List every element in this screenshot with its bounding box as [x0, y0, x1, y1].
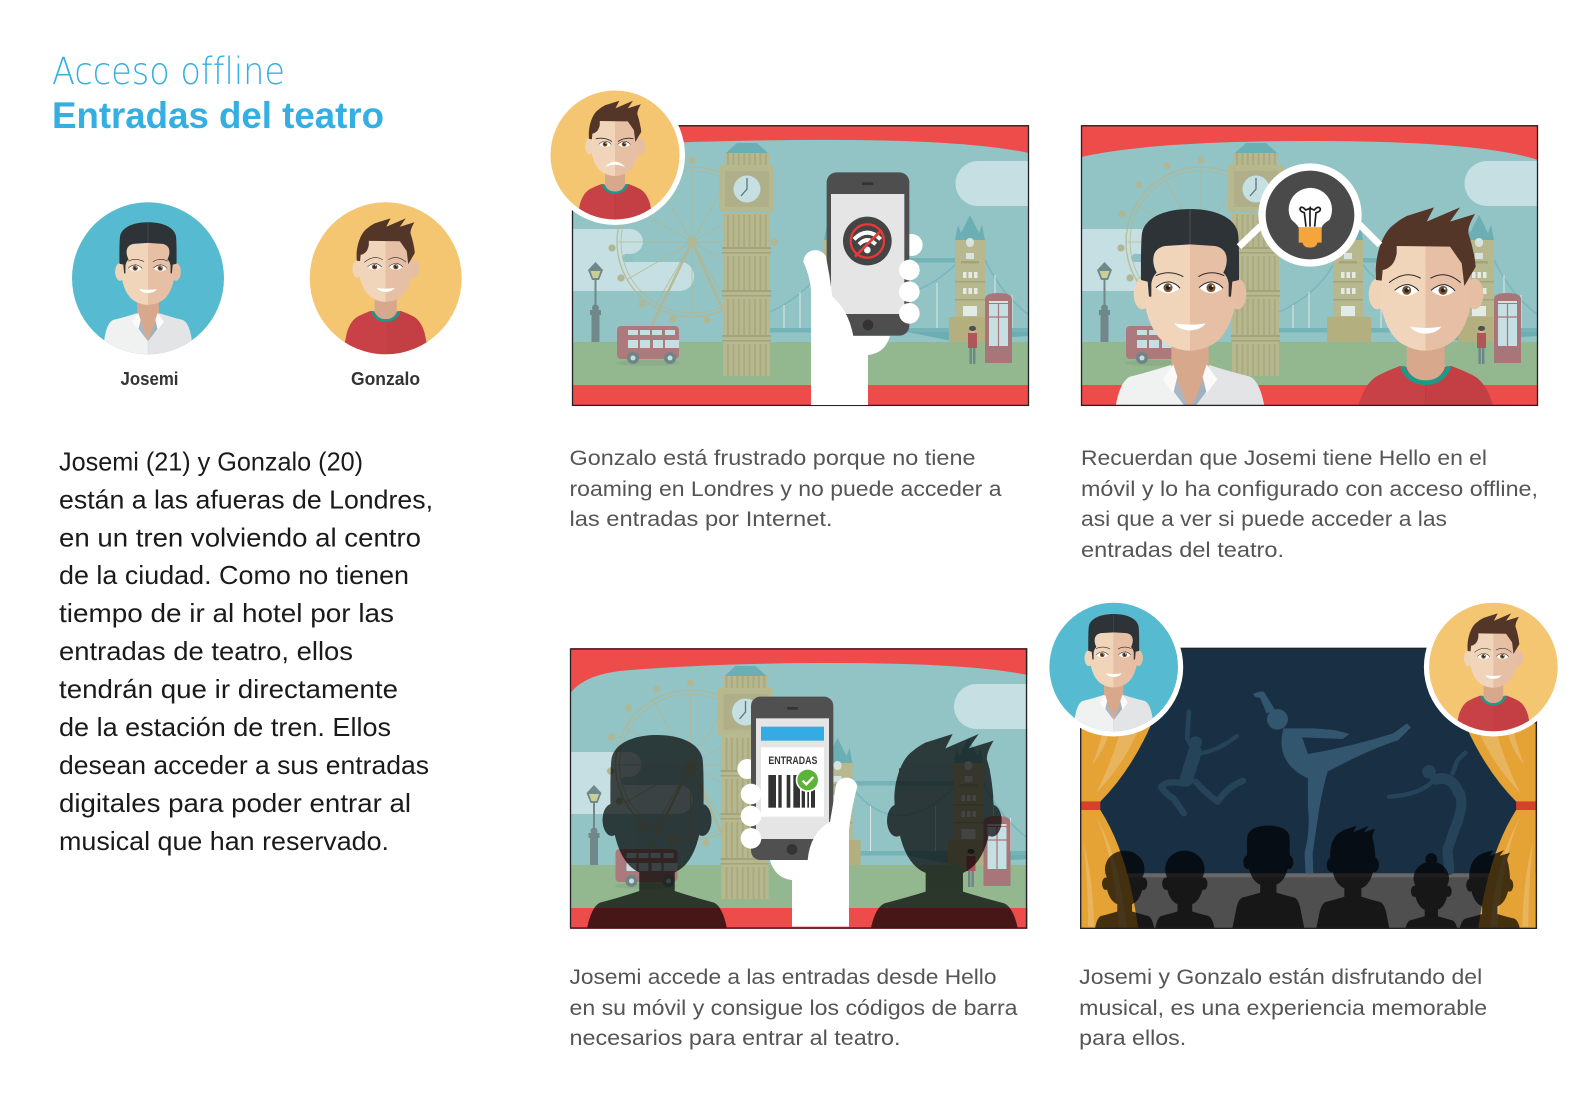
intro paragraph: de la estación de tren. Ellos [59, 712, 391, 742]
caption 3: Josemi accede a las entradas desde Hello [570, 965, 997, 989]
panel 3: Josemi gets the tickets [570, 648, 1028, 929]
london background scene [572, 125, 1029, 406]
intro paragraph: están a las afueras de Londres, [59, 484, 433, 514]
intro paragraph: de la ciudad. Como no tienen [59, 560, 409, 590]
london background scene [570, 648, 1028, 929]
caption 4 [1079, 965, 1487, 1050]
caption 1 [570, 446, 1002, 531]
intro paragraph: entradas de teatro, ellos [59, 636, 353, 666]
avatar: Josemi [72, 202, 224, 389]
intro paragraph: digitales para poder entrar al [59, 788, 411, 818]
frame [570, 649, 1026, 928]
frame [572, 126, 1028, 405]
avatar: Josemi: Josemi [120, 369, 178, 389]
intro paragraph: en un tren volviendo al centro [59, 522, 421, 552]
phone showing barcode tickets [737, 697, 833, 860]
caption 1: las entradas por Internet. [570, 507, 832, 531]
badge: Gonzalo frustrated [545, 85, 685, 228]
intro paragraph [59, 446, 433, 856]
caption 2: Recuerdan que Josemi tiene Hello en el [1081, 446, 1487, 470]
intro paragraph: desean acceder a sus entradas [59, 750, 429, 780]
intro paragraph: tiempo de ir al hotel por las [59, 598, 394, 628]
audience silhouettes [1095, 826, 1520, 928]
silhouettes of both friends from behind [587, 734, 1018, 928]
caption 1: roaming en Londres y no puede acceder a [570, 477, 1002, 501]
phone in hand with no-wifi icon [803, 172, 923, 405]
theatre stage [1081, 648, 1536, 959]
caption 2: asi que a ver si puede acceder a las [1081, 507, 1447, 531]
badge: Gonzalo [1424, 598, 1563, 739]
hand holding phone [741, 778, 857, 927]
title: Entradas del teatro [52, 95, 384, 136]
silhouette: Josemi from behind [587, 735, 727, 928]
silhouette: Gonzalo from behind [871, 734, 1018, 928]
caption 4: para ellos. [1079, 1026, 1186, 1050]
intro paragraph: tendrán que ir directamente [59, 674, 398, 704]
panel 1: Gonzalo frustrated, no wifi [545, 85, 1029, 406]
caption 3: en su móvil y consigue los códigos de barra [570, 996, 1018, 1020]
badge: Josemi [1044, 598, 1183, 739]
panel 2: idea, Josemi has Hello [1080, 125, 1538, 406]
frame [1081, 648, 1536, 928]
phone showing barcode tickets: ENTRADAS [768, 755, 817, 767]
avatar: Gonzalo [310, 202, 462, 389]
caption 4: Josemi y Gonzalo están disfrutando del [1079, 965, 1482, 989]
curtains [1081, 723, 1152, 928]
caption 2: móvil y lo ha configurado con acceso offline, [1081, 477, 1538, 501]
caption 3 [570, 965, 1018, 1050]
faces of Josemi and Gonzalo [1116, 207, 1492, 405]
panel 4: at the theatre [1049, 602, 1558, 929]
title: Acceso offline [52, 50, 285, 93]
caption 4: musical, es una experiencia memorable [1079, 996, 1487, 1020]
icon: light bulb thought bubble [1239, 163, 1380, 267]
frame [1082, 126, 1538, 405]
avatar: Gonzalo: Gonzalo [351, 369, 420, 389]
title [52, 50, 384, 136]
dancer right [1389, 753, 1465, 870]
dancer centre [1253, 691, 1411, 873]
caption 3: necesarios para entrar al teatro. [570, 1026, 900, 1050]
intro paragraph: musical que han reservado. [59, 826, 389, 856]
caption 2: entradas del teatro. [1081, 538, 1284, 562]
dancer left [1161, 712, 1243, 813]
caption 2 [1081, 446, 1538, 562]
intro paragraph: Josemi (21) y Gonzalo (20) [59, 446, 363, 476]
london background scene [1081, 125, 1538, 406]
silhouettes and phone with tickets [587, 696, 1018, 928]
caption 1: Gonzalo está frustrado porque no tiene [570, 446, 976, 470]
